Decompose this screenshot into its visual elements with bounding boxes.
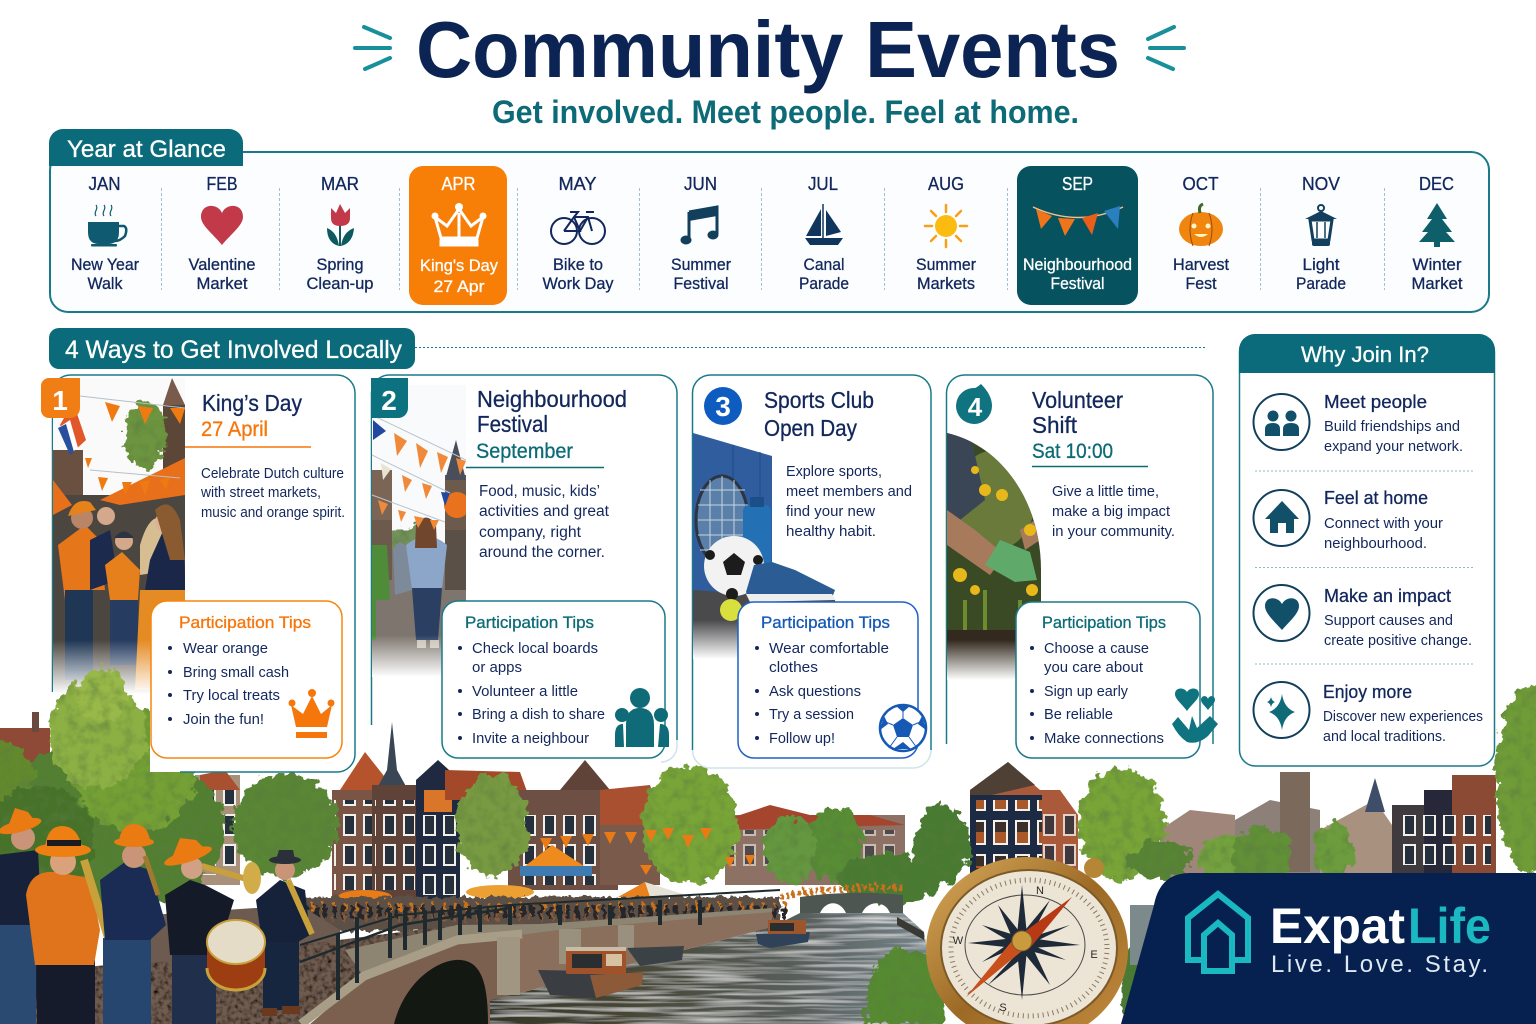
participation tips 3: Participation Tips	[761, 613, 890, 632]
participation tips 1: Try local treats	[183, 687, 280, 704]
logo panel: ExpatLife	[1121, 873, 1536, 1024]
card heading	[1032, 387, 1148, 466]
card heading	[764, 387, 874, 441]
month: October: Harvest	[1173, 255, 1229, 274]
panel: year at a glance	[49, 129, 1489, 312]
month: March: Clean-up	[306, 274, 374, 293]
card 2: Neighbourhood Festival	[371, 375, 677, 762]
card heading: Shift	[1032, 412, 1078, 438]
compass markings: W	[953, 935, 964, 947]
month: September highlight: Neighbourhood	[1023, 255, 1132, 274]
participation tips 2: Bring a dish to share	[472, 706, 605, 723]
number badge 3	[704, 387, 742, 425]
participation tips 1: Wear orange	[183, 640, 268, 657]
month: February	[188, 174, 256, 293]
card description: find your new	[786, 503, 875, 520]
month: October	[1173, 174, 1229, 293]
railing	[300, 890, 780, 1000]
icon: football	[880, 705, 926, 751]
card background	[692, 375, 931, 768]
month: April highlight	[409, 166, 507, 305]
card description	[479, 483, 610, 561]
participation tips 3	[738, 602, 926, 758]
panel header	[1239, 334, 1495, 373]
bunting	[373, 420, 466, 530]
participation tips 3: Follow up!	[769, 730, 835, 747]
month: May: Work Day	[542, 274, 614, 293]
card heading: Sat 10:00	[1032, 440, 1113, 463]
month: June	[671, 174, 731, 293]
reason: enjoy more: Enjoy more	[1323, 682, 1412, 702]
icon: crown	[288, 689, 334, 738]
participation tips 2: Check local boards	[472, 640, 598, 657]
card heading: Neighbourhood	[477, 386, 627, 412]
month: January: Walk	[88, 274, 123, 293]
month dividers	[162, 188, 1384, 290]
icon: left title accent	[355, 27, 390, 69]
reason: meet people: Build friendships and	[1324, 419, 1460, 435]
participation tips 2	[442, 601, 669, 758]
month: October: OCT	[1182, 174, 1218, 194]
foreground tree	[47, 667, 147, 787]
compass rose	[968, 885, 1080, 1000]
icon: right title accent	[1148, 27, 1184, 69]
month: December: Market	[1412, 274, 1463, 293]
card description: make a big impact	[1052, 503, 1171, 520]
month: November: Parade	[1296, 274, 1346, 293]
month: September highlight	[1017, 166, 1138, 305]
number badge 3: 3	[715, 391, 731, 422]
participation tips 3: Wear comfortable	[769, 640, 889, 657]
month: November	[1296, 174, 1346, 293]
compass markings	[953, 885, 1098, 1014]
festival bunting	[540, 828, 755, 875]
month: September highlight: Festival	[1050, 274, 1104, 293]
logo wordmark: Life	[1408, 898, 1491, 954]
participation tips 2: Volunteer a little	[472, 683, 578, 700]
photo: street festival crowd	[47, 378, 185, 787]
reason: make an impact: Make an impact	[1324, 586, 1451, 606]
subtitle: Get involved. Meet people. Feel at home.	[492, 94, 1079, 130]
far bridge	[800, 893, 903, 913]
reason: feel at home	[1254, 488, 1443, 552]
participation tips 4	[1016, 602, 1218, 758]
icon: brass compass	[926, 857, 1128, 1024]
month: April highlight: APR	[442, 174, 476, 194]
month: August: Summer	[916, 255, 976, 274]
number badge 2: 2	[381, 385, 397, 416]
number badge 1: 1	[52, 385, 68, 416]
month: May	[542, 174, 614, 293]
tab heading: Year at Glance	[67, 136, 226, 163]
month: March: Spring	[316, 255, 364, 274]
reason: make an impact	[1254, 585, 1472, 649]
canal water	[392, 913, 940, 1024]
month: May: Bike to	[553, 255, 603, 274]
card 3: Sports Club Open Day	[692, 375, 931, 768]
participation tips 1: Participation Tips	[179, 613, 311, 632]
month: November: Light	[1302, 255, 1340, 274]
logo wordmark: Expat	[1270, 898, 1405, 954]
card description: in your community.	[1052, 523, 1175, 540]
quay bank on far side	[897, 917, 924, 940]
compass markings: S	[999, 1002, 1007, 1014]
participation tips 2: or apps	[472, 659, 522, 676]
card heading: Open Day	[764, 415, 857, 441]
participation tips 4: you care about	[1044, 659, 1144, 676]
card heading: Volunteer	[1032, 387, 1123, 413]
month: January	[71, 174, 139, 293]
panel: why join in	[1239, 334, 1495, 766]
card background	[946, 375, 1213, 762]
month: August: AUG	[928, 174, 964, 194]
reason: make an impact: Support causes and	[1324, 613, 1453, 629]
card description	[786, 463, 912, 540]
participation tips 4: Be reliable	[1044, 706, 1113, 723]
market tents	[338, 845, 692, 904]
photo: community gardening	[947, 433, 1043, 680]
water behind logo	[1130, 905, 1154, 965]
month: October: Fest	[1186, 274, 1217, 293]
month: December: Winter	[1412, 255, 1462, 274]
logo wordmark	[1270, 898, 1491, 954]
dutch flag	[58, 402, 86, 455]
bunting	[85, 402, 185, 495]
card description	[1052, 483, 1175, 540]
reason: meet people: Meet people	[1324, 392, 1427, 412]
reason: meet people: expand your network.	[1324, 439, 1463, 455]
participation tips 2: Invite a neighbour	[472, 730, 589, 747]
card heading	[466, 386, 627, 468]
card background	[371, 375, 677, 760]
month: December: DEC	[1419, 174, 1454, 194]
month: December	[1412, 174, 1463, 293]
panel header: Why Join In?	[1301, 342, 1429, 367]
participation tips 4: Choose a cause	[1044, 640, 1149, 657]
number badge 1	[41, 378, 80, 418]
month: April highlight: King's Day	[420, 256, 498, 275]
card description: Celebrate Dutch culture	[201, 466, 344, 482]
reason: enjoy more	[1254, 682, 1483, 745]
month: November: NOV	[1302, 174, 1340, 194]
month: May: MAY	[558, 174, 596, 194]
card description: meet members and	[786, 483, 912, 500]
logo tagline: Live. Love. Stay.	[1271, 951, 1488, 978]
month: July: Parade	[799, 274, 849, 293]
photo: festival street	[372, 418, 466, 677]
crowd along the quay	[300, 887, 905, 931]
participation tips 2: Participation Tips	[465, 613, 594, 632]
month: February: Market	[196, 274, 248, 293]
card heading: King’s Day	[202, 390, 302, 416]
compass markings: E	[1090, 949, 1098, 961]
number badge 4: 4	[968, 392, 983, 422]
card 4: Volunteer Shift	[946, 375, 1218, 762]
participation tips 3: Try a session	[769, 706, 854, 723]
month: February: Valentine	[188, 255, 256, 274]
card heading	[185, 390, 311, 447]
reason: meet people	[1254, 392, 1463, 455]
brass band of musicians	[0, 808, 312, 1024]
month: January: New Year	[71, 255, 139, 274]
reason: feel at home: neighbourhood.	[1324, 536, 1427, 552]
people	[58, 528, 105, 600]
card description: with street markets,	[200, 485, 321, 501]
reason: feel at home: Feel at home	[1324, 488, 1428, 508]
icon: community group	[615, 688, 669, 747]
participation tips 1: Bring small cash	[183, 664, 289, 681]
participation tips 3: Ask questions	[769, 683, 861, 700]
reason: enjoy more: Discover new experiences	[1323, 709, 1483, 725]
shrubs by the canal	[865, 945, 1149, 1024]
month: January: JAN	[88, 174, 120, 194]
month: February: FEB	[206, 174, 238, 194]
month: April highlight: 27 Apr	[434, 277, 485, 296]
section heading: 4 ways: 4 Ways to Get Involved Locally	[65, 336, 402, 364]
card heading: 27 April	[201, 418, 268, 441]
month: June: JUN	[684, 174, 717, 194]
card heading: Sports Club	[764, 387, 874, 413]
tab heading	[49, 129, 243, 166]
number badge 4	[956, 384, 992, 424]
compass markings: N	[1036, 885, 1044, 897]
card 1: King's Day	[41, 375, 355, 787]
cobbled ground and quay	[0, 905, 772, 1024]
month: March	[306, 174, 374, 293]
illustration: Dutch canal street scene	[0, 685, 1536, 1024]
month: June: Festival	[674, 274, 728, 293]
month: July: JUL	[808, 174, 838, 194]
reason: enjoy more: and local traditions.	[1323, 729, 1446, 745]
card description: Food, music, kids’	[479, 483, 600, 500]
card description: around the corner.	[479, 544, 605, 561]
card heading: September	[476, 440, 573, 463]
month: July: Canal	[804, 255, 844, 274]
card heading: Festival	[477, 411, 548, 437]
reason: feel at home: Connect with your	[1324, 516, 1443, 532]
participation tips 4: Make connections	[1044, 730, 1164, 747]
month: September highlight: SEP	[1062, 174, 1093, 194]
reason: make an impact: create positive change.	[1324, 633, 1472, 649]
card description: music and orange spirit.	[201, 505, 345, 521]
compass needle	[966, 897, 1072, 997]
participation tips 4: Sign up early	[1044, 683, 1128, 700]
title: Community Events	[416, 5, 1120, 94]
far buildings	[0, 712, 1496, 900]
card description: company, right	[479, 524, 582, 541]
card background	[52, 375, 355, 772]
month: June: Summer	[671, 255, 731, 274]
participation tips 4: Participation Tips	[1042, 613, 1166, 632]
photo: sports gear	[693, 433, 840, 660]
participation tips 1: Join the fun!	[183, 711, 264, 728]
card description: Give a little time,	[1052, 483, 1159, 500]
number badge 2	[371, 378, 408, 418]
card description: healthy habit.	[786, 523, 876, 540]
participation tips 1	[151, 601, 342, 758]
participation tips 3: clothes	[769, 659, 818, 676]
month: August: Markets	[917, 274, 975, 293]
boats	[538, 920, 810, 998]
icon: house logo	[1188, 894, 1248, 971]
card description	[200, 466, 345, 521]
card description: Explore sports,	[786, 463, 882, 480]
icon: hands and hearts	[1172, 688, 1218, 743]
card description: activities and great	[479, 503, 610, 520]
month: July	[799, 174, 849, 293]
month: August	[916, 174, 976, 293]
trees	[0, 685, 1536, 915]
section heading: 4 ways	[49, 328, 415, 369]
month: March: MAR	[321, 174, 359, 194]
